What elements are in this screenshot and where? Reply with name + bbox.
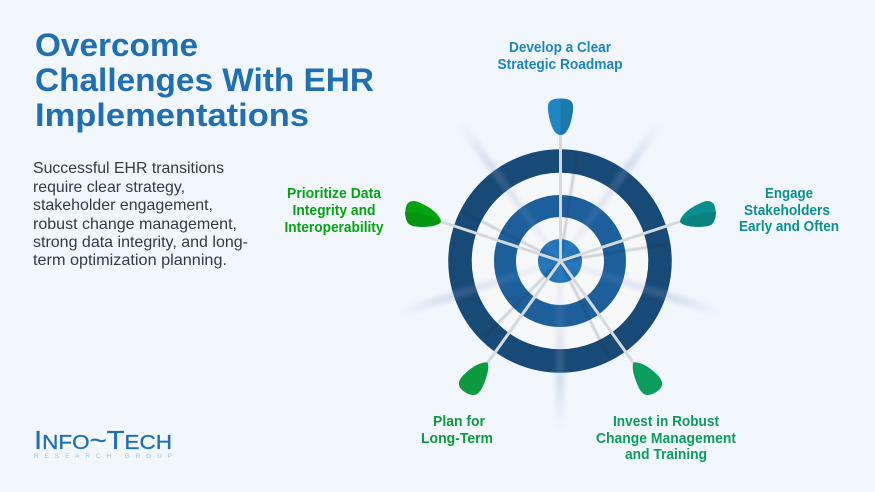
- intro text: Successful EHR transitions: [33, 160, 224, 177]
- dart: left: [405, 201, 560, 261]
- intro text: term optimization planning.: [33, 252, 227, 269]
- light streak shadows: [392, 121, 723, 431]
- dart shadows: [463, 153, 668, 358]
- label: Engage Stakeholders Early and Often: Engage: [765, 186, 813, 202]
- dart: bottom left: [459, 261, 560, 395]
- intro text: strong data integrity, and long-: [33, 234, 248, 251]
- target diagram: [392, 98, 723, 431]
- label: Plan for Long-Term: Long-Term: [421, 431, 493, 447]
- label: Prioritize Data Integrity and Interoperability: Interoperability: [284, 220, 384, 236]
- dart: bottom right: [560, 261, 662, 395]
- intro text: require clear strategy,: [33, 179, 185, 196]
- label: Invest in Robust Change Management and Training: and Training: [625, 447, 707, 463]
- title: Overcome: [35, 27, 198, 63]
- label: Prioritize Data Integrity and Interoperability: Prioritize Data: [287, 186, 382, 202]
- label: Plan for Long-Term: Plan for: [433, 414, 485, 430]
- label: Engage Stakeholders Early and Often: Stakeholders: [744, 203, 830, 219]
- title: Implementations: [35, 97, 309, 133]
- dart: right: [560, 201, 716, 261]
- label: Develop a Clear Strategic Roadmap: Develop a Clear: [509, 40, 611, 56]
- label: Develop a Clear Strategic Roadmap: Strategic Roadmap: [498, 57, 623, 73]
- title: [35, 27, 374, 133]
- label: Invest in Robust Change Management and Training: Invest in Robust: [613, 414, 719, 430]
- title: Challenges With EHR: [35, 62, 374, 98]
- target rings: [460, 161, 660, 361]
- logo: Info-Tech Research Group: INFO~TECH: [34, 425, 172, 455]
- intro text: stakeholder engagement,: [33, 197, 213, 214]
- intro text: [33, 160, 248, 269]
- label: Prioritize Data Integrity and Interoperability: Integrity and: [292, 203, 376, 219]
- label: Invest in Robust Change Management and Training: Change Management: [596, 431, 736, 447]
- label: Prioritize Data Integrity and Interoperability: [284, 186, 384, 236]
- intro text: robust change management,: [33, 216, 237, 233]
- label: Plan for Long-Term: [421, 414, 493, 447]
- label: Invest in Robust Change Management and Training: [596, 414, 736, 463]
- logo: Info-Tech Research Group: RESEARCH GROUP: [34, 453, 172, 460]
- label: Engage Stakeholders Early and Often: Early and Often: [739, 219, 839, 235]
- label: Engage Stakeholders Early and Often: [739, 186, 839, 235]
- label: Develop a Clear Strategic Roadmap: [498, 40, 623, 73]
- dart: top: [548, 98, 573, 261]
